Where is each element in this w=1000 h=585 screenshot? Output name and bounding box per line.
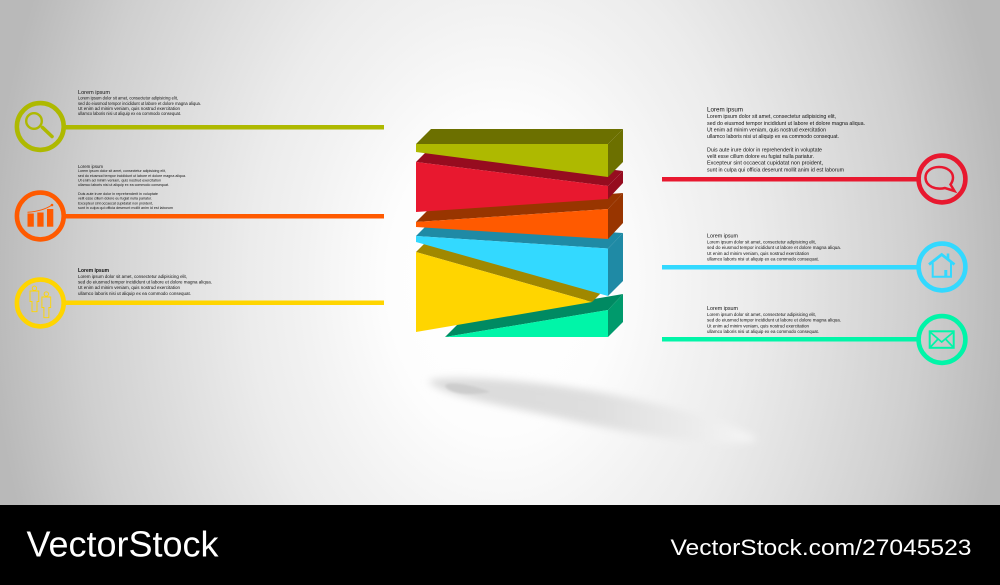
text block: Lorem ipsum <box>707 306 738 312</box>
text block: Lorem ipsum dolor sit amet, consectetur adipisicing elit, <box>707 114 836 120</box>
slice: green <box>445 294 623 337</box>
image id text: VectorStock.com/27045523 <box>670 535 972 560</box>
text block: Lorem ipsum <box>78 164 103 169</box>
text block: sed do eiusmod tempor incididunt ut labore et dolore magna aliqua. <box>707 121 865 127</box>
text block: Lorem ipsum <box>707 234 738 240</box>
item: speech (right, red) <box>662 106 965 202</box>
footer band <box>0 505 1000 585</box>
text block: sed do eiusmod tempor incididunt ut labore et dolore magna aliqua. <box>78 174 186 178</box>
text block: Excepteur sint occaecat cupidatat non proident, <box>707 160 823 166</box>
icon: two people <box>17 280 64 326</box>
text block: Ut enim ad minim veniam, quis nostrud exercitation <box>78 179 161 183</box>
slice: olive <box>416 129 623 177</box>
connector line <box>662 265 918 270</box>
text block: ullamco laboris nisi ut aliquip ex ea commodo consequat. <box>78 183 169 187</box>
text block: Ut enim ad minim veniam, quis nostrud exercitation <box>78 285 180 290</box>
text block: Lorem ipsum <box>78 90 110 96</box>
icon: envelope <box>919 316 965 363</box>
text block <box>78 90 201 116</box>
text block: velit esse cillum dolore eu fugiat nulla pariatur. <box>78 197 152 201</box>
icon: house <box>919 244 965 290</box>
3D sliced cube <box>416 129 623 337</box>
slice: red <box>416 147 623 212</box>
item: home (right, blue) <box>662 234 965 290</box>
text block <box>707 306 841 334</box>
slice: yellow <box>416 237 607 332</box>
text block: sunt in culpa qui officia deserunt mollit anim id est laborum <box>78 206 173 210</box>
text block: Ut enim ad minim veniam, quis nostrud exercitation <box>78 106 181 111</box>
brand logo text: VectorStock <box>26 524 219 564</box>
text block: Ut enim ad minim veniam, quis nostrud exercitation <box>707 324 810 328</box>
text block <box>78 268 212 296</box>
text block: ullamco laboris nisi ut aliquip ex ea commodo consequat. <box>707 329 819 334</box>
slice: blue <box>416 221 623 296</box>
connector line <box>64 300 384 305</box>
text block <box>707 234 841 262</box>
text block: Lorem ipsum <box>78 268 109 274</box>
icon: magnifier <box>17 103 64 150</box>
text block: sed do eiusmod tempor incididunt ut labore et dolore magna aliqua. <box>78 101 201 106</box>
text block: ullamco laboris nisi ut aliquip ex ea commodo consequat. <box>78 291 191 296</box>
connector line <box>662 177 918 182</box>
connector line <box>662 337 918 342</box>
text block: Ut enim ad minim veniam, quis nostrud exercitation <box>707 251 810 256</box>
text block: Lorem ipsum dolor sit amet, consectetur adipisicing elit, <box>78 274 187 279</box>
text block: sed do eiusmod tempor incididunt ut labore et dolore magna aliqua. <box>707 245 841 250</box>
icon: speech bubble <box>919 156 965 202</box>
item: mail (right, green) <box>662 306 965 363</box>
text block: sed do eiusmod tempor incididunt ut labore et dolore magna aliqua. <box>78 280 212 284</box>
text block: sed do eiusmod tempor incididunt ut labore et dolore magna aliqua. <box>707 318 841 323</box>
text block: Ut enim ad minim veniam, quis nostrud exercitation <box>707 128 826 134</box>
icon: bar chart <box>17 193 64 239</box>
connector line <box>64 125 384 130</box>
text block: Lorem ipsum <box>707 106 743 114</box>
text block: Lorem ipsum dolor sit amet, consectetur adipisicing elit, <box>78 96 178 101</box>
text block: ullamco laboris nisi ut aliquip ex ea commodo consequat. <box>707 134 839 140</box>
text block <box>707 106 865 174</box>
text block: Duis aute irure dolor in reprehenderit in voluptate <box>78 192 158 196</box>
item: people (left, yellow) <box>17 268 384 326</box>
text block: Lorem ipsum dolor sit amet, consectetur adipisicing elit, <box>707 312 816 317</box>
text block: Duis aute irure dolor in reprehenderit in voluptate <box>707 148 822 154</box>
text block: sunt in culpa qui officia deserunt mollit anim id est laborum <box>707 168 844 174</box>
text block: ullamco laboris nisi ut aliquip ex ea commodo consequat. <box>707 256 819 262</box>
text block: Excepteur sint occaecat cupidatat non proident, <box>78 201 153 205</box>
item: chart (left, orange) <box>17 164 384 239</box>
text block: Lorem ipsum dolor sit amet, consectetur adipisicing elit, <box>78 169 166 173</box>
slice: orange <box>416 193 623 239</box>
item: search (left, olive) <box>17 90 384 150</box>
cube shadow <box>428 378 757 443</box>
text block: velit esse cillum dolore eu fugiat nulla pariatur. <box>707 154 814 160</box>
text block: ullamco laboris nisi ut aliquip ex ea commodo consequat. <box>78 111 181 116</box>
connector line <box>64 214 384 218</box>
text block <box>78 164 186 210</box>
text block: Lorem ipsum dolor sit amet, consectetur adipisicing elit, <box>707 240 816 244</box>
